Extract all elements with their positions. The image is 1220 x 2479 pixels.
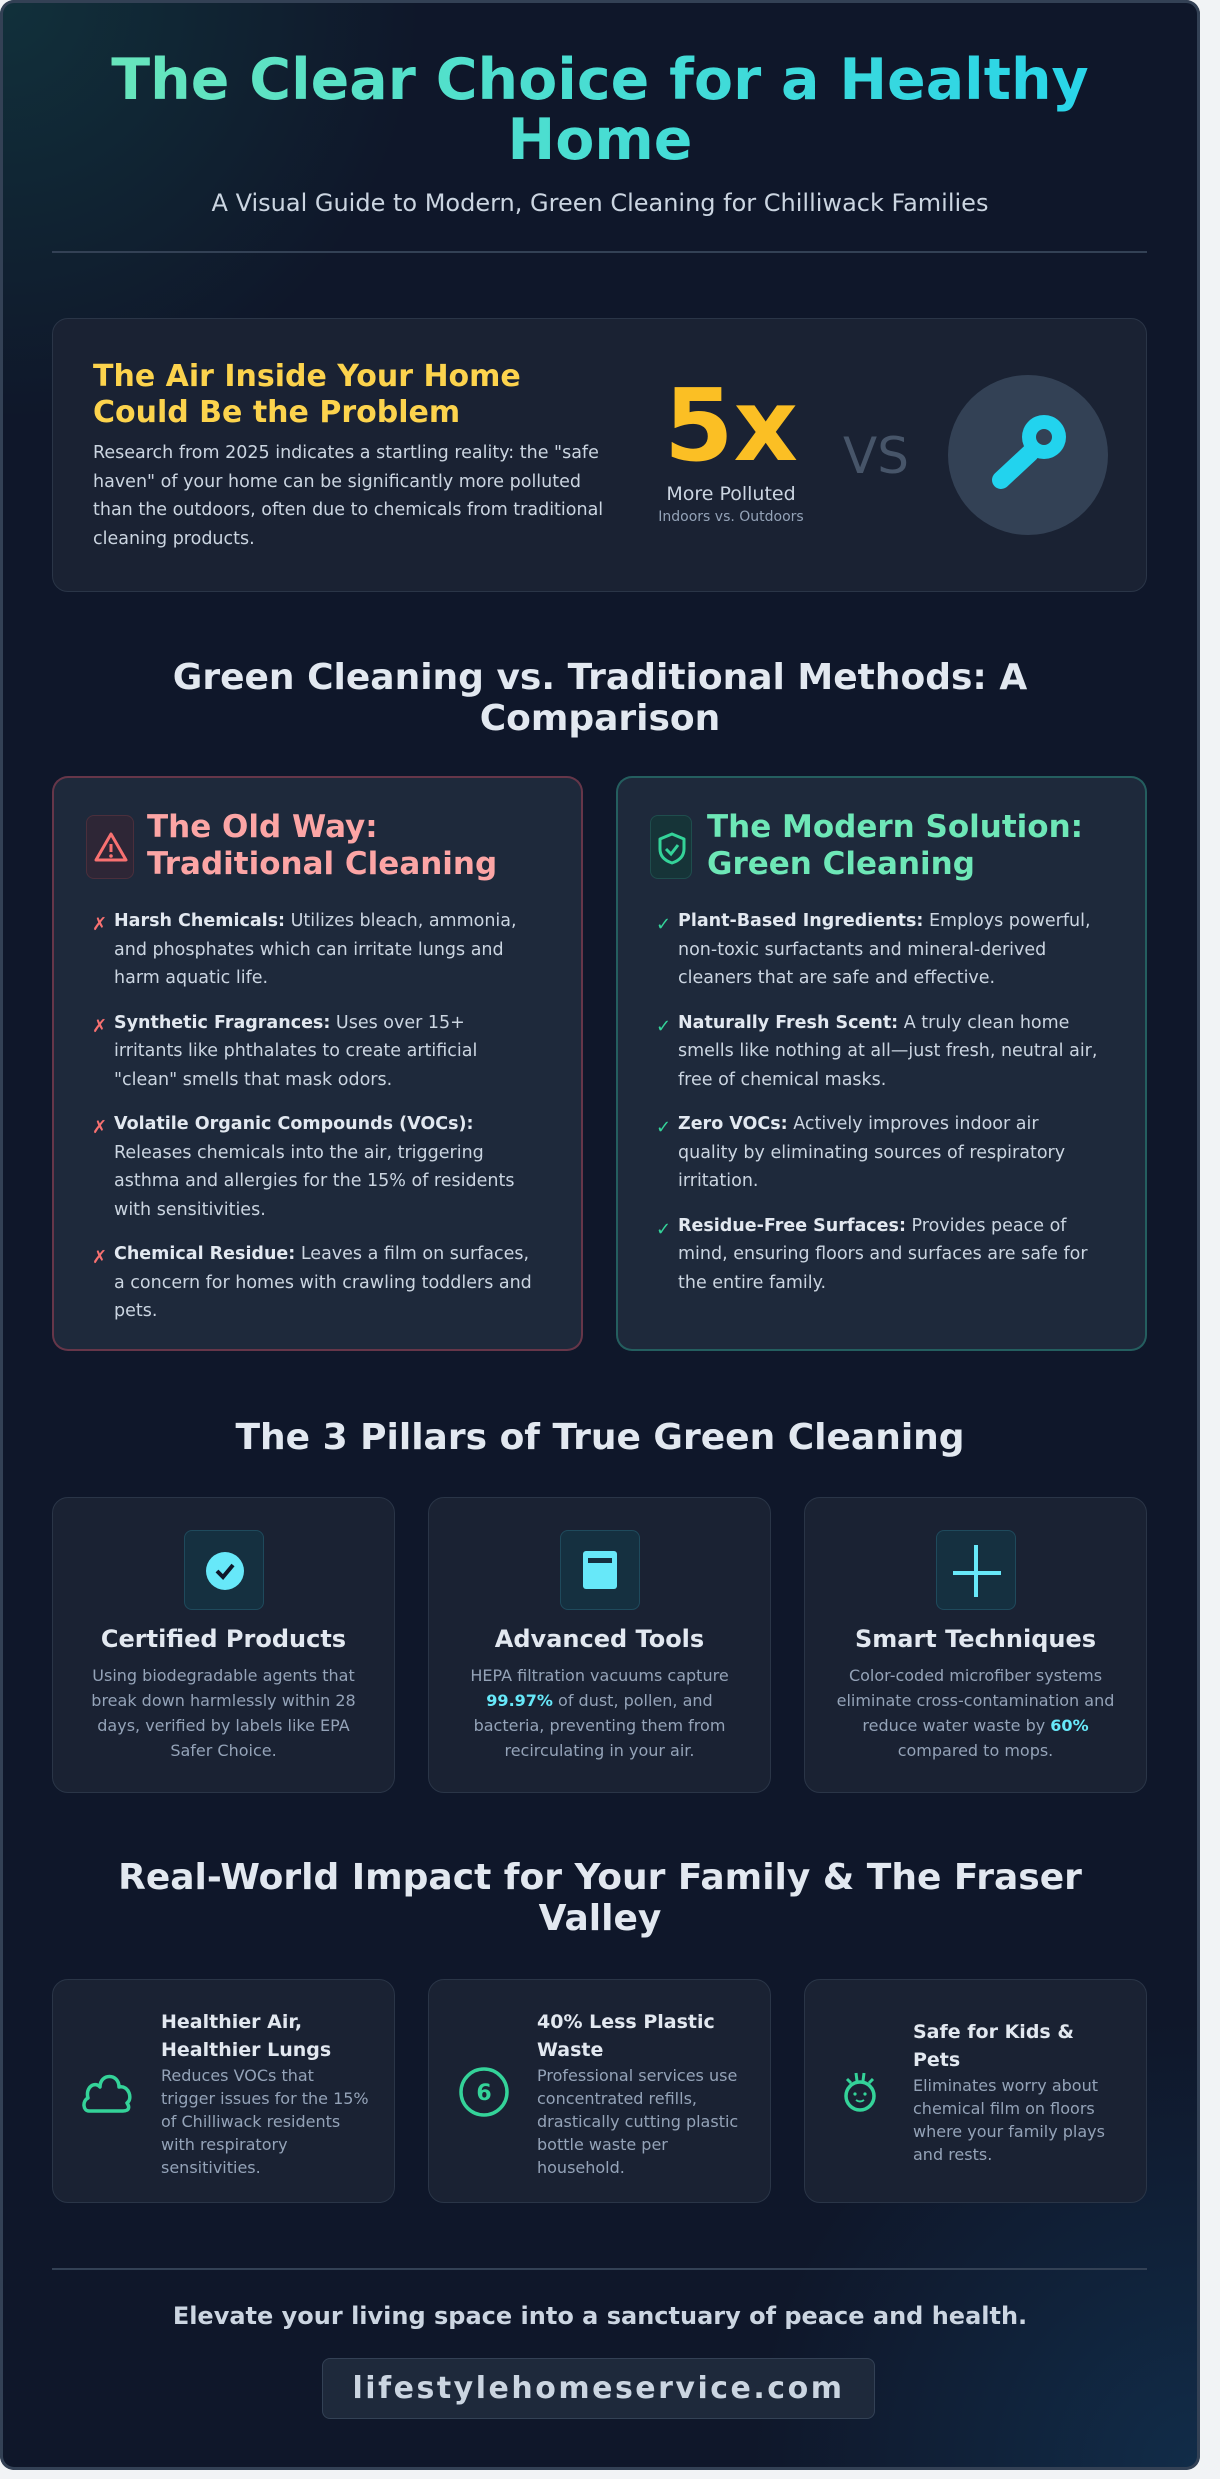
list: benefits: Naturally Fresh Scent: A truly clean home smells like nothing at all—just fresh, neutral air, free of chemical masks.: [678, 1012, 1097, 1090]
list: harms: ✗: [92, 1117, 107, 1138]
footer tagline: Elevate your living space into a sanctuary of peace and health.: [173, 2302, 1027, 2330]
stat: 5x: 5x: [664, 367, 798, 484]
heading: modern: [707, 809, 1083, 882]
text: research: Research from 2025 indicates a startling reality: the "safe haven" of your home can be significantly more polluted than the outdoors, often due to chemicals from traditional cleaning products.: [93, 443, 603, 548]
pillar: certified products: Certified Products: [101, 1625, 346, 1653]
list: benefits: quality by eliminating sources of respiratory irritation.: [678, 1142, 1065, 1191]
impact: healthier air: [52, 1979, 395, 2203]
heading: modern: Green Cleaning: [707, 846, 975, 882]
icon: six circle: [459, 2067, 509, 2117]
section heading: comparison: Comparison: [480, 698, 720, 739]
section heading: impact: [118, 1857, 1082, 1939]
icon: shield: [650, 815, 692, 879]
impact: safe for kids: Pets: [913, 2049, 960, 2071]
pillar: advanced tools: Advanced Tools: [495, 1625, 704, 1653]
pillar: smart techniques: Color-coded microfiber systems eliminate cross-contamination and reduce water waste by 60% compared to mops.: [837, 1666, 1114, 1760]
pillar: advanced tools: [428, 1497, 771, 1793]
list: harms: Synthetic Fragrances: Uses over 15+ irritants like phthalates to create artificial "clean" smells that mask odors.: [114, 1012, 477, 1090]
subtitle: A Visual Guide to Modern, Green Cleaning for Chilliwack Families: [212, 189, 988, 217]
impact: safe for kids: Safe for Kids &: [913, 2021, 1074, 2043]
section heading: comparison: Green Cleaning vs. Traditional Methods: A: [173, 657, 1027, 698]
impact: safe for kids: Eliminates worry about chemical film on floors where your family plays and rests.: [913, 2076, 1105, 2164]
pillar: certified products: Using biodegradable agents that break down harmlessly within 28 days, verified by labels like EPA Safer Choice.: [91, 1666, 356, 1760]
panel: air quality: [52, 318, 1147, 592]
impact: healthier air: Healthier Lungs: [161, 2039, 331, 2061]
impact: healthier air: Reduces VOCs that trigger issues for the 15% of Chilliwack residents with respiratory sensitivities.: [161, 2066, 369, 2177]
list: benefits: ✓: [656, 1016, 671, 1036]
list: harms: Chemical Residue: Leaves a film on surfaces, a concern for homes with crawling toddlers and pets.: [114, 1244, 532, 1321]
heading: air inside: Could Be the Problem: [93, 395, 460, 430]
heading: modern: The Modern Solution:: [707, 809, 1083, 845]
icon: plus: [936, 1530, 1016, 1610]
list: benefits: [656, 911, 1097, 1292]
list: benefits: ✓: [656, 1218, 671, 1240]
list: harms: Harsh Chemicals: Utilizes bleach, ammonia, and phosphates which can irritate lungs and harm aquatic life.: [114, 911, 517, 988]
panel: old way: [52, 776, 583, 1351]
icon: warning: [86, 815, 134, 879]
icon: six circle: 6: [476, 2081, 492, 2106]
section heading: impact: Real-World Impact for Your Family & The Fraser: [118, 1857, 1082, 1898]
section heading: impact: Valley: [539, 1898, 661, 1939]
list: harms: ✗: [92, 1247, 107, 1268]
section heading: comparison: [173, 657, 1027, 739]
list: harms: Volatile Organic Compounds (VOCs): Releases chemicals into the air, triggering asthma and allergies for the 15% of residents with sensitivities.: [114, 1114, 514, 1220]
impact: less plastic: Professional services use concentrated refills, drastically cutting plastic bottle waste per household.: [537, 2066, 738, 2177]
pillar: smart techniques: Smart Techniques: [855, 1625, 1096, 1653]
title: [0, 50, 1200, 170]
heading: air inside: [93, 359, 521, 430]
pillar: certified products: [52, 1497, 395, 1793]
panel: modern solution: [616, 776, 1147, 1351]
list: benefits: Residue-Free Surfaces: Provides peace of mind, ensuring floors and surfaces are safe for the entire family.: [678, 1216, 1088, 1292]
impact: safe for kids: [804, 1979, 1147, 2203]
icon: check badge: [184, 1530, 264, 1610]
list: harms: [92, 911, 532, 1321]
stat: 5x: [658, 367, 804, 525]
impact: less plastic: 40% Less Plastic: [537, 2011, 715, 2033]
stat: 5x: Indoors vs. Outdoors: [658, 509, 804, 525]
title: The Clear Choice for a Healthy: [111, 47, 1089, 113]
pillar: smart techniques: [804, 1497, 1147, 1793]
heading: old way: The Old Way:: [147, 809, 378, 845]
pillar: advanced tools: HEPA filtration vacuums capture 99.97% of dust, pollen, and bacteria, preventing them from recirculating in your air.: [470, 1666, 729, 1760]
impact: less plastic: Waste: [537, 2039, 603, 2061]
footer url badge: lifestylehomeservice.com: [353, 2371, 844, 2406]
impact: less plastic: [428, 1979, 771, 2203]
list: benefits: Zero VOCs: Actively improves indoor air: [678, 1114, 1039, 1134]
list: benefits: Plant-Based Ingredients: Employs powerful, non-toxic surfactants and mineral-derived cleaners that are safe and effective.: [678, 911, 1091, 988]
heading: old way: Traditional Cleaning: [147, 846, 497, 882]
impact: healthier air: Healthier Air,: [161, 2011, 302, 2033]
section heading: pillars: The 3 Pillars of True Green Cleaning: [235, 1417, 965, 1458]
stat: 5x: More Polluted: [666, 483, 796, 505]
heading: air inside: The Air Inside Your Home: [93, 359, 521, 394]
icon: cloud: [82, 2074, 132, 2113]
vs label: VS: [843, 427, 909, 485]
list: harms: ✗: [92, 1016, 107, 1036]
heading: old way: [147, 809, 497, 882]
list: harms: ✗: [92, 914, 107, 935]
footer url badge: [322, 2358, 875, 2419]
icon: key circle: [948, 375, 1108, 535]
list: benefits: ✓: [656, 914, 671, 935]
icon: baby face: [844, 2072, 876, 2112]
title: Home: [508, 107, 692, 173]
list: benefits: ✓: [656, 1117, 671, 1138]
icon: filter: [560, 1530, 640, 1610]
